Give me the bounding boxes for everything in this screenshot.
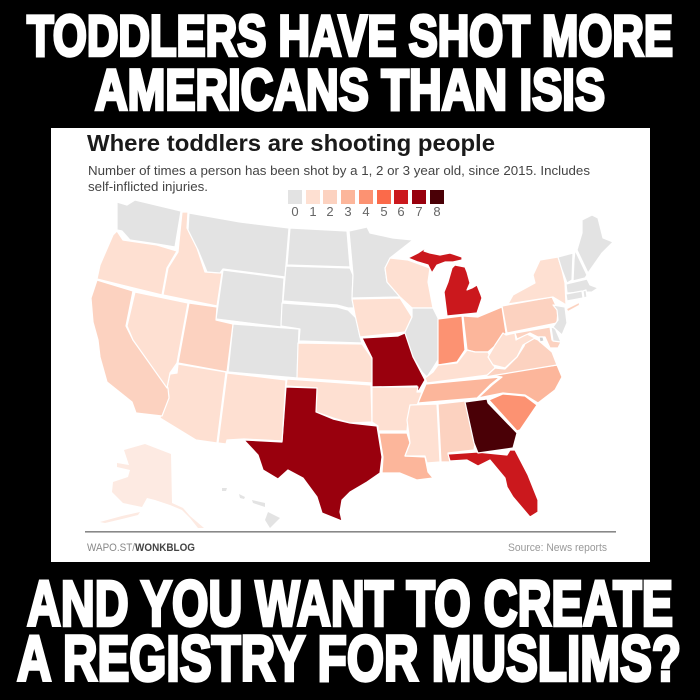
state: Georgia [465,399,517,453]
state: Vermont [558,253,573,283]
state: Alaska [112,444,204,528]
state: Minnesota [349,227,413,298]
chart title: Where toddlers are shooting people [87,130,495,156]
state: West Virginia [488,333,535,368]
legend: 3 [344,204,352,219]
state: Mississippi [405,404,440,463]
state: North Carolina [478,365,562,403]
headline top [27,4,673,122]
state: Hawaii [222,488,280,528]
legend: 1 [309,204,317,219]
state: DC [539,337,544,342]
state: Arkansas [372,387,422,431]
legend: 4 [362,204,370,219]
state: Maryland [515,327,561,348]
state: Long Island [567,303,579,311]
state: Michigan upper peninsula [408,247,462,273]
state: California [91,280,169,416]
state: New Jersey [553,305,567,335]
state: Texas [244,387,382,521]
state: South Carolina [489,394,537,431]
state: Wisconsin [385,258,433,308]
state: Pennsylvania [502,297,558,333]
state: Kansas [297,343,372,383]
state: Indiana [438,316,465,365]
chart subtitle: Number of times a person has been shot by a 1, 2 or 3 year old, since 2015. Includes [88,163,591,178]
state: Massachusetts [566,279,598,293]
legend: 6 [397,204,405,219]
state: North Dakota [287,228,350,267]
state: Illinois [400,308,440,377]
headline bottom [17,568,681,694]
state: Connecticut [566,291,583,301]
state: Montana [188,213,289,277]
state: Rhode Island [583,290,587,298]
state: Iowa [352,298,412,337]
state: Idaho [163,212,222,306]
state: Louisiana [379,433,433,480]
state: Arizona [160,364,226,443]
state: Nebraska [281,303,362,343]
state: Ohio [463,307,506,352]
state: Tennessee [418,377,500,403]
state: Oklahoma [286,379,372,423]
state: Alabama [438,401,475,462]
state: Alaska peninsula [100,512,140,523]
footer rule [85,531,616,533]
state: Colorado [228,324,299,378]
state: Virginia [485,336,557,377]
chart subtitle: self-inflicted injuries. [88,179,208,194]
legend: 7 [415,204,423,219]
legend: 8 [433,204,441,219]
state: New York [508,257,566,305]
legend: 0 [291,204,299,219]
state: Florida [448,450,538,517]
state: Delaware [551,327,561,342]
state: Michigan lower peninsula [444,265,482,316]
legend: 5 [380,204,388,219]
state: South Dakota [283,266,355,308]
state: Washington [117,200,181,247]
footer source: Source: News reports [508,542,607,554]
panel: chart card [51,128,650,562]
state: New Hampshire [573,250,587,281]
state: Maine [577,215,613,273]
legend [288,190,444,219]
state: Wyoming [216,270,284,327]
map of US states [91,200,613,528]
state: Nevada [127,292,188,388]
state: Missouri [362,333,425,392]
chart subtitle [88,163,591,194]
legend: 2 [326,204,334,219]
state: Kentucky [425,350,495,383]
state: New Mexico [218,373,286,444]
footer credit: WAPO.ST/WONKBLOG [87,542,195,554]
state: Oregon [97,231,177,295]
state: Utah [178,303,233,372]
